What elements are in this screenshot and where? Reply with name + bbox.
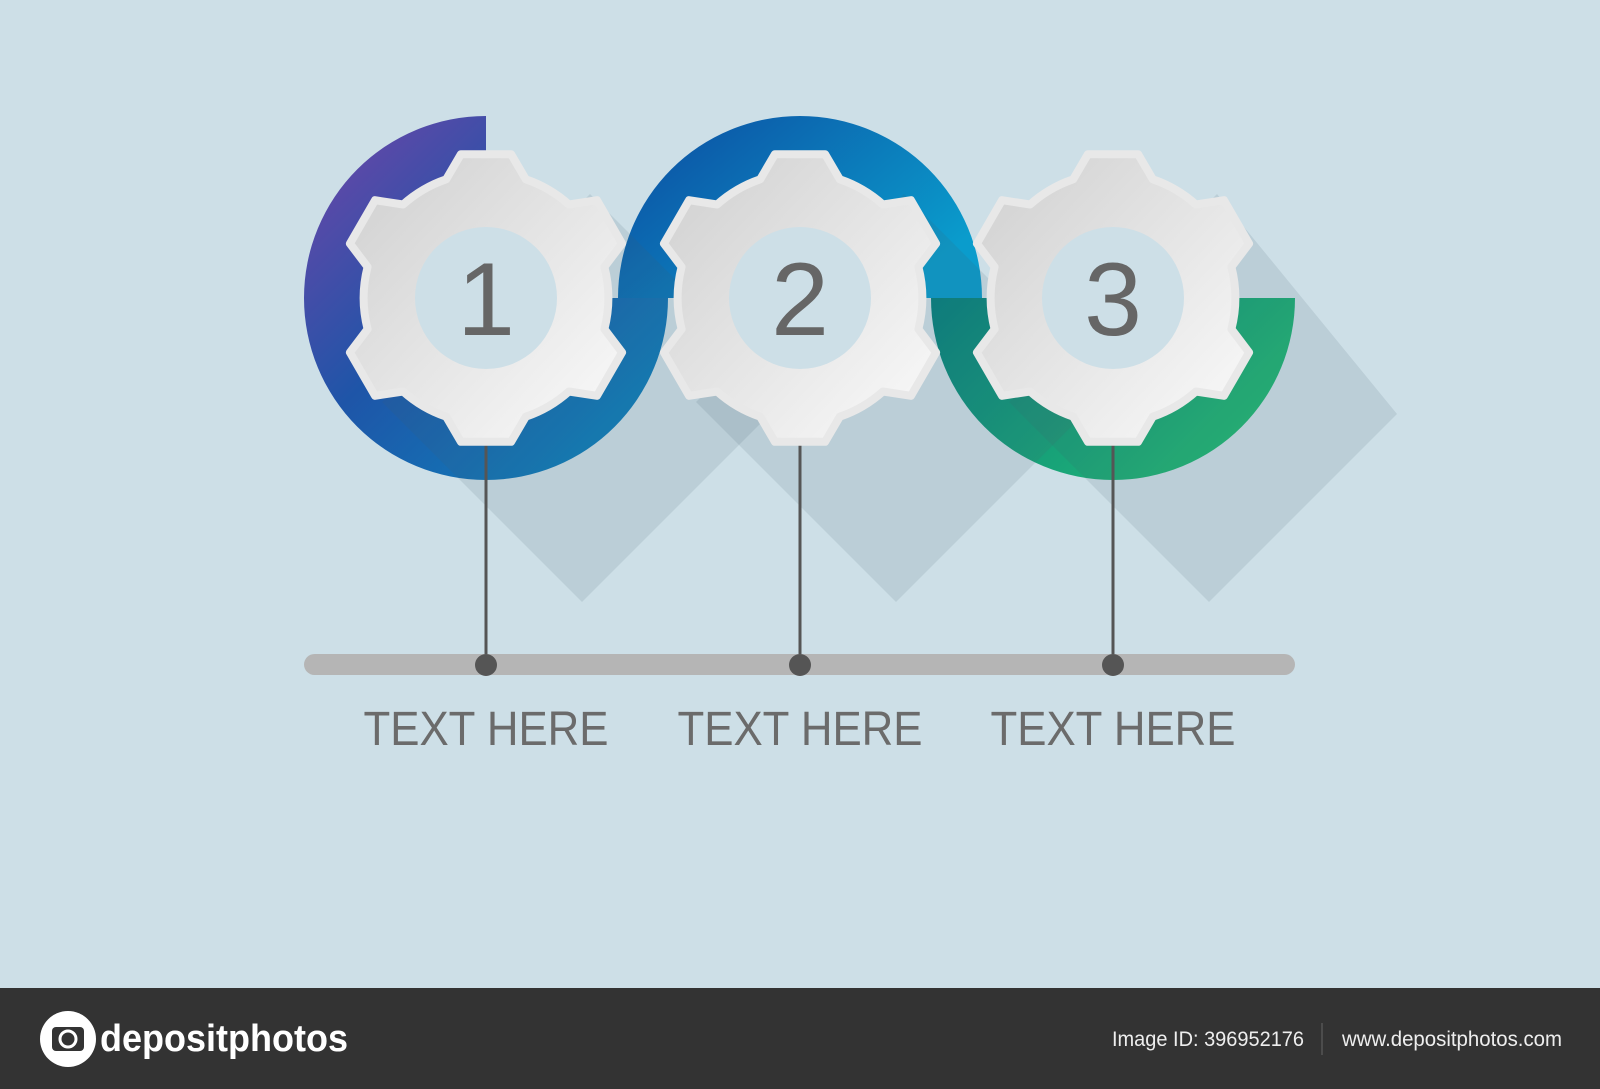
gear 1: 1: [457, 242, 515, 358]
timeline bar: [304, 654, 1295, 675]
labels: [364, 703, 1236, 756]
ring: circle 3 (bottom half): [931, 298, 1295, 480]
website: www.depositphotos.com: [1341, 1028, 1562, 1051]
gear 3: [977, 154, 1249, 442]
labels: TEXT HERE: [364, 703, 608, 756]
image id: Image ID: 396952176: [1112, 1028, 1304, 1051]
footer bar: [0, 988, 1600, 1089]
ring: circle 1 (three quarters): [304, 116, 668, 480]
labels: TEXT HERE: [990, 703, 1236, 756]
long shadows: [382, 194, 1397, 602]
gear 1: [350, 154, 622, 442]
labels: TEXT HERE: [678, 703, 922, 756]
gear 3: 3: [1084, 242, 1142, 358]
timeline dots: [475, 654, 1124, 676]
gear 2: [664, 154, 936, 442]
connector lines: [486, 440, 1113, 665]
gear 2: 2: [771, 242, 829, 358]
logo text: depositphotos: [100, 1018, 348, 1060]
logo icon: [40, 1011, 96, 1067]
ring: circle 2 (top half): [618, 116, 982, 298]
